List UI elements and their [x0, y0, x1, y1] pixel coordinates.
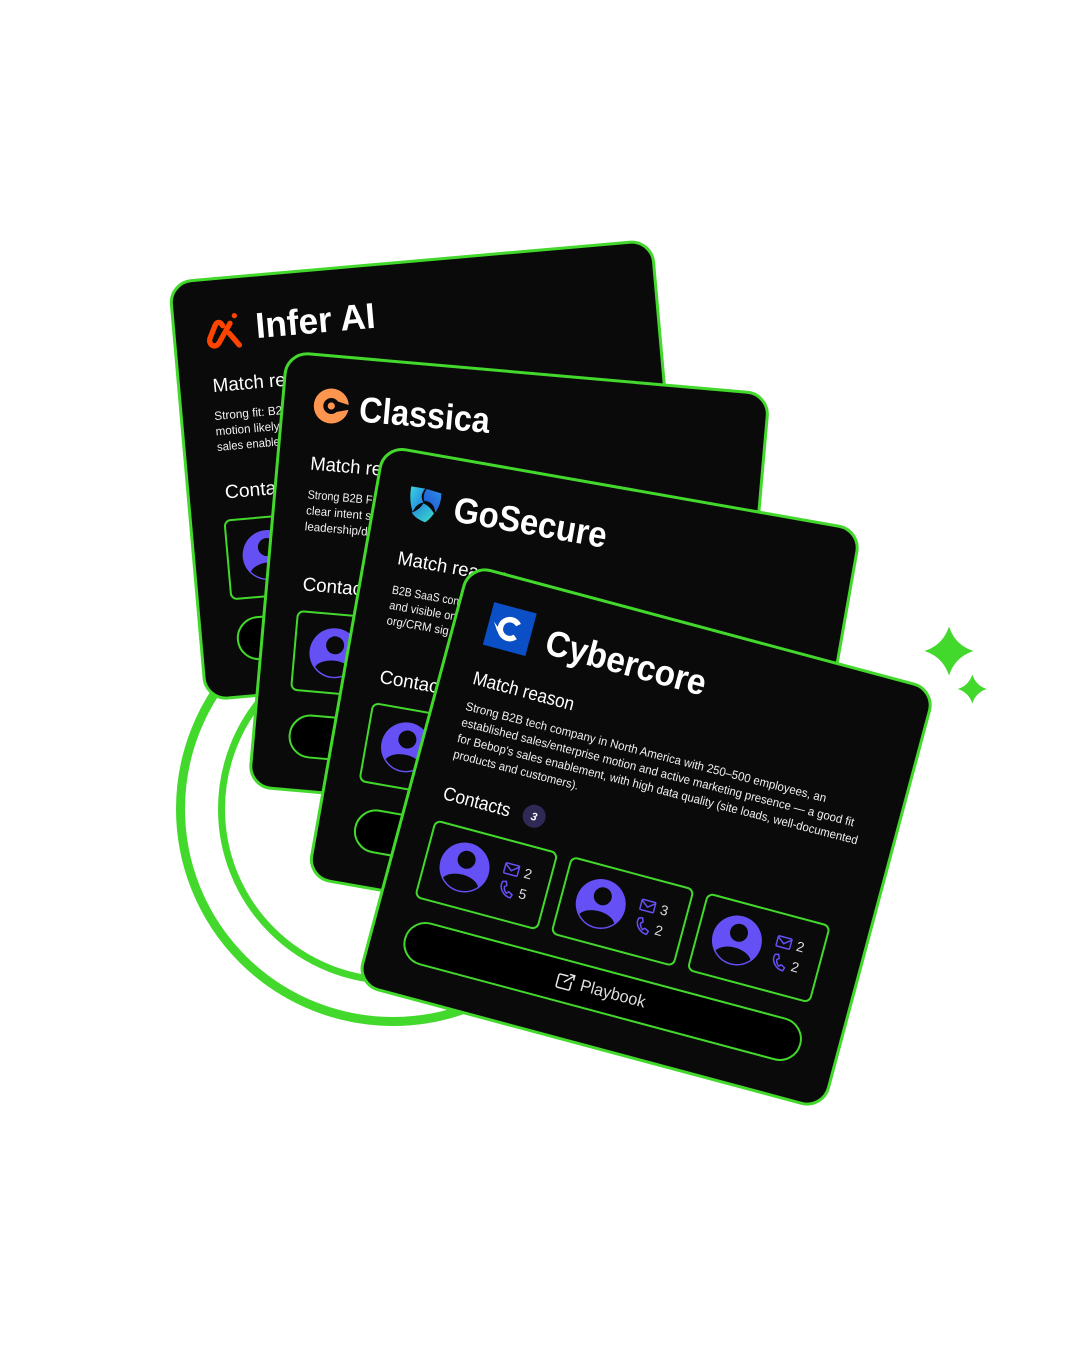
contact card 2 — [551, 857, 694, 966]
company name: Classica — [358, 389, 492, 441]
icon: external link — [556, 972, 575, 991]
match reason text: Strong B2B tech company in North America with 250–500 employees, an — [464, 699, 828, 805]
card background — [357, 565, 935, 1109]
badge: contact count — [520, 802, 548, 830]
match reason text: org/CRM sig — [386, 613, 450, 638]
icon: large sparkle — [924, 626, 974, 676]
panel: Classica card — [249, 352, 769, 829]
heading: match reason: Match reason — [309, 453, 423, 484]
company name: Infer AI — [254, 295, 377, 346]
contact card 3: 2 — [795, 938, 807, 955]
icon: Classica logo — [314, 388, 350, 424]
heading: contacts: Contacts — [378, 667, 454, 700]
panel: Infer AI card — [170, 240, 688, 700]
heading: contacts: Contacts — [224, 476, 302, 503]
match reason text: clear intent s — [306, 503, 372, 523]
card background — [308, 446, 861, 961]
contact card 1: 2 — [522, 865, 534, 882]
badge: contact count: 3 — [529, 811, 538, 824]
inner green ring — [222, 638, 564, 980]
playbook button — [352, 807, 761, 919]
playbook label: Playbook — [578, 976, 648, 1012]
contact card 3: 2 — [789, 958, 801, 976]
heading: match reason: Match reason — [396, 548, 510, 588]
playbook button — [288, 714, 701, 791]
contact card 1: 5 — [517, 885, 529, 903]
heading: match reason: Match reason — [212, 366, 327, 397]
heading: contacts: Contacts — [441, 783, 513, 822]
match reason text — [386, 583, 460, 639]
match reason text: products and customers). — [452, 747, 580, 793]
card background — [170, 240, 688, 700]
match reason text: for Bebop's sales enablement, with high data quality (site loads, well-documented — [456, 731, 859, 847]
icon: Infer AI logo — [210, 313, 239, 346]
contact card 2: 3 — [658, 901, 670, 919]
contact card — [291, 611, 423, 701]
match reason text: Strong B2B F — [307, 487, 373, 507]
company name: Cybercore — [541, 621, 711, 704]
match reason text: Strong fit: B2 — [214, 403, 283, 423]
icon: small sparkle — [958, 674, 987, 704]
match reason text: sales enable — [216, 434, 281, 454]
match reason text — [214, 403, 286, 454]
heading: contacts: Contacts — [302, 574, 377, 602]
contact card 3 — [688, 893, 830, 1002]
match reason text: and visible on — [388, 598, 458, 624]
icon: Cybercore logo — [483, 602, 537, 656]
panel: Cybercore card — [357, 565, 935, 1109]
card background — [249, 352, 769, 829]
match reason text: B2B SaaS con — [391, 583, 460, 608]
company name: GoSecure — [451, 488, 610, 556]
contact card — [224, 510, 357, 599]
match reason text: motion likely — [215, 419, 280, 439]
heading: match reason: Match reason — [471, 668, 576, 715]
panel: GoSecure card — [308, 446, 861, 961]
playbook button — [236, 583, 650, 661]
playbook button — [400, 918, 806, 1065]
outer green ring — [180, 596, 606, 1022]
icon: GoSecure logo — [410, 486, 441, 522]
match reason text: established sales/enterprise motion and active marketing presence — a good fit — [460, 715, 856, 830]
contact card 2: 2 — [653, 922, 665, 939]
contact card 1 — [415, 820, 557, 929]
contact card — [359, 703, 497, 803]
match reason text — [304, 487, 373, 539]
match reason text: leadership/d — [304, 519, 368, 539]
